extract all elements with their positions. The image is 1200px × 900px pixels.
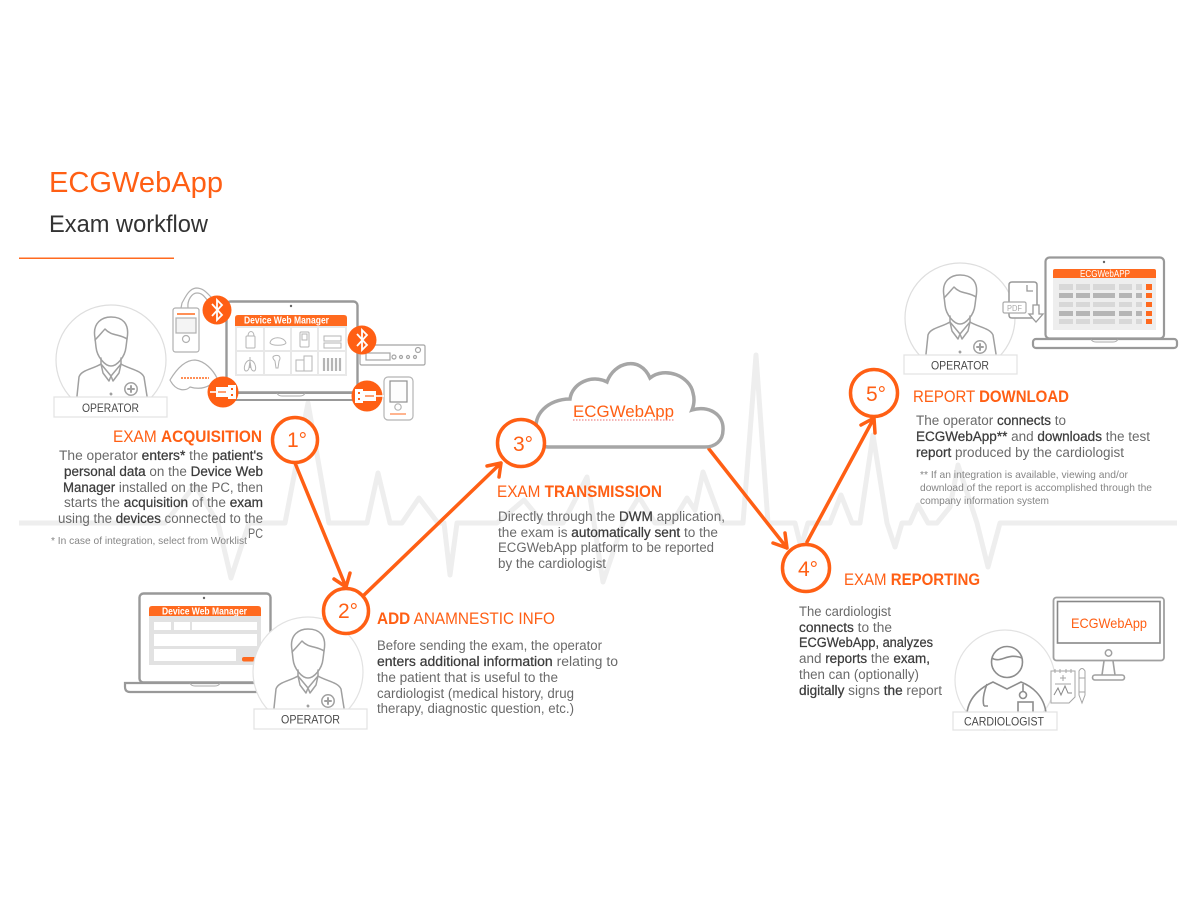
- operator 1 with label: OPERATOR: [82, 401, 139, 415]
- step 3 body: [498, 509, 725, 571]
- step 2 body: [377, 638, 618, 716]
- device: handheld monitor: [384, 377, 413, 420]
- step 1 body: The operator enters* the patient's: [59, 448, 263, 463]
- subtitle: Exam workflow: [49, 211, 209, 238]
- cardiologist with label: CARDIOLOGIST: [964, 714, 1045, 728]
- operator 3 with label: OPERATOR: [931, 358, 989, 372]
- laptop: Device Web Manager with devices: [170, 288, 425, 420]
- step 3 body: ECGWebApp platform to be reported: [498, 540, 714, 555]
- step 5 footnote: ** If an integration is available, viewing and/or: [920, 469, 1128, 481]
- arrow 2 to 3: [363, 463, 501, 596]
- step 1 body: [58, 448, 263, 541]
- step 2 body: enters additional information relating to: [377, 654, 618, 669]
- step 3 body: by the cardiologist: [498, 556, 606, 571]
- step 2 heading: ADD ANAMNESTIC INFO: [377, 610, 555, 628]
- step marker 4: [782, 544, 830, 592]
- step 1 body: PC: [248, 526, 263, 541]
- step 4 body: then can (optionally): [799, 667, 919, 682]
- step marker 3: [498, 420, 544, 466]
- step marker 1: [272, 418, 318, 462]
- step 5 footnote: [920, 469, 1152, 507]
- step 4 body: The cardiologist: [799, 604, 891, 619]
- icon: clipboard and pen: [1051, 668, 1085, 703]
- cloud: ECGWebApp: [573, 402, 674, 421]
- step 4 body: and reports the exam,: [799, 651, 930, 666]
- icon: bluetooth 1: [202, 296, 232, 324]
- step 2 body: therapy, diagnostic question, etc.): [377, 701, 574, 716]
- laptop: anamnestic form: Device Web Manager: [162, 606, 247, 618]
- icon: PDF download: PDF: [1007, 304, 1022, 313]
- step 5 body: report produced by the cardiologist: [916, 445, 1124, 460]
- ECG line: [19, 355, 1177, 582]
- device: holter recorder: [173, 288, 212, 352]
- step 1 body: personal data on the Device Web: [64, 464, 263, 479]
- step marker 5: [850, 370, 898, 416]
- step 3 body: Directly through the DWM application,: [498, 509, 725, 524]
- step marker 1: 1°: [287, 429, 307, 452]
- step 4 body: [799, 604, 942, 698]
- step 1 heading: EXAM ACQUISITION: [113, 428, 262, 446]
- cardiologist with label: [953, 630, 1057, 730]
- step 3 heading: EXAM TRANSMISSION: [497, 483, 662, 501]
- step 5 body: The operator connects to: [916, 413, 1066, 428]
- title: ECGWebApp: [49, 167, 223, 199]
- operator 2 with label: [253, 617, 367, 729]
- monitor: ECGWebApp: ECGWebApp: [1071, 615, 1147, 631]
- step 3 body: the exam is automatically sent to the: [498, 525, 718, 540]
- step 2 body: the patient that is useful to the: [377, 670, 558, 685]
- step 5 body: [916, 413, 1150, 460]
- operator 1 with label: [54, 305, 167, 417]
- step 5 footnote: download of the report is accomplished through the: [920, 482, 1152, 494]
- step 4 heading: EXAM REPORTING: [844, 571, 980, 589]
- arrows: [295, 418, 875, 596]
- step 2 body: Before sending the exam, the operator: [377, 638, 602, 653]
- icon: usb 1: [208, 376, 238, 408]
- cloud: [536, 364, 723, 447]
- arrow 1 to 2: [295, 463, 350, 587]
- step 2 body: cardiologist (medical history, drug: [377, 686, 574, 701]
- step 4 body: digitally signs the report: [799, 683, 942, 698]
- laptop: report list: [1033, 258, 1177, 348]
- arrow 4 to 5: [807, 418, 875, 542]
- arrow 3 to 4: [709, 449, 787, 548]
- operator 3 with label: [904, 263, 1017, 374]
- step 1 body: using the devices connected to the: [58, 511, 263, 526]
- step 5 body: ECGWebApp** and downloads the test: [916, 429, 1150, 444]
- step 4 body: connects to the: [799, 620, 892, 635]
- app tile grid: [237, 328, 345, 374]
- step 1 body: Manager installed on the PC, then: [63, 480, 263, 495]
- monitor: ECGWebApp: [1054, 598, 1164, 680]
- step marker 5: 5°: [866, 383, 886, 406]
- laptop: report list: ECGWebAPP: [1080, 269, 1130, 280]
- icon: PDF download: [1003, 282, 1043, 322]
- laptop: Device Web Manager with devices: Device Web Manager: [244, 314, 329, 326]
- step 1 body: starts the acquisition of the exam: [64, 495, 263, 510]
- step 5 heading: REPORT DOWNLOAD: [913, 388, 1069, 406]
- device: spirometer: [170, 360, 217, 390]
- step 5 footnote: company information system: [920, 495, 1049, 507]
- step marker 3: 3°: [513, 433, 533, 456]
- step 4 body: ECGWebApp, analyzes: [799, 635, 933, 650]
- icon: bluetooth 2: [348, 326, 376, 354]
- step marker 2: [324, 588, 368, 634]
- report rows: [1059, 284, 1152, 324]
- laptop: anamnestic form: [125, 594, 285, 692]
- step marker 2: 2°: [338, 600, 358, 623]
- icon: usb 2: [352, 380, 384, 412]
- step 1 footnote: * In case of integration, select from Worklist: [51, 535, 247, 547]
- device: desktop recorder: [360, 345, 425, 365]
- operator 2 with label: OPERATOR: [281, 712, 340, 726]
- step marker 4: 4°: [798, 558, 818, 581]
